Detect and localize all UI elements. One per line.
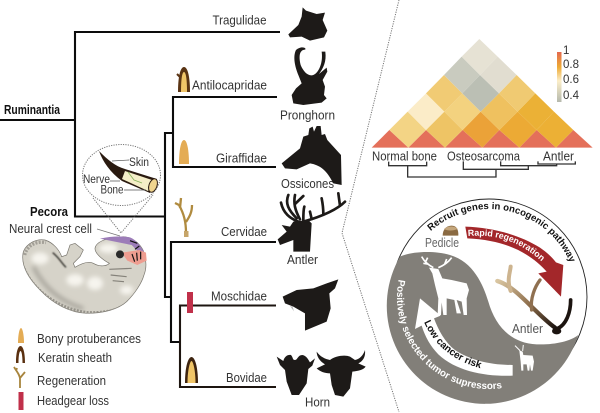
label: pedicle: Pedicle: [425, 236, 459, 250]
white arrow: low cancer risk: [415, 298, 513, 376]
legend: regeneration: Regeneration: [37, 374, 106, 388]
heatmap sample labels: Antler: [543, 148, 575, 164]
heatmap colour legend: 0.6: [563, 74, 579, 86]
headgear labels: [280, 108, 335, 410]
legend: [14, 328, 141, 410]
dendrogram: [389, 161, 575, 177]
heatmap sample labels: [372, 148, 575, 164]
headgear labels: Horn: [305, 394, 330, 410]
icon: small white deer: [515, 345, 534, 371]
embryo illustration: [23, 236, 147, 313]
heatmap colour legend: [557, 45, 580, 102]
heatmap colour legend: 0.4: [563, 90, 580, 102]
icon: giraffid bony protuberance: [179, 140, 189, 164]
headgear labels: Ossicones: [281, 176, 334, 191]
taxon labels: Bovidae: [226, 370, 267, 385]
cross section labels: Bone: [100, 184, 124, 196]
legend: keratin sheath: Keratin sheath: [38, 351, 112, 365]
silhouette: pronghorn head: [292, 47, 327, 105]
curved text: recruit genes: Recruit genes in oncogenic pathway: [427, 202, 575, 261]
heatmap triangle: [372, 39, 593, 148]
icon: headgear loss bar: [187, 292, 193, 313]
label: Neural crest cell: Neural crest cell: [9, 222, 92, 236]
headgear labels: Antler: [287, 252, 319, 267]
icon: cervid antler regeneration: [175, 198, 192, 237]
grey swoosh: [387, 252, 578, 404]
taxon labels: Antilocapridae: [192, 78, 267, 92]
heatmap sample labels: Osteosarcoma: [447, 148, 521, 164]
silhouette: giraffe head: [282, 126, 342, 185]
antler cross section: [99, 151, 159, 193]
silhouette: musk deer head: [283, 279, 338, 331]
taxon labels: Giraffidae: [216, 150, 267, 166]
pointer: neural crest cell: [97, 229, 120, 236]
cross section labels: Nerve: [83, 174, 110, 186]
curved text: low cancer risk: Low cancer risk: [424, 320, 482, 368]
taxon labels: Moschidae: [211, 288, 267, 304]
icon: bovid keratin sheath: [185, 357, 198, 383]
heatmap sample labels: Normal bone: [372, 148, 437, 164]
taxon labels: [192, 12, 267, 385]
dotted divider: [342, 0, 399, 412]
legend: bony protuberances: Bony protuberances: [37, 332, 141, 346]
legend: headgear loss: Headgear loss: [37, 394, 109, 408]
icon: large white stag: [422, 257, 469, 315]
heatmap colour legend: 0.8: [563, 59, 579, 71]
icon: antilocaprid keratin sheath: [177, 67, 190, 92]
cross section labels: Skin: [129, 157, 149, 169]
cycle circle panel: [387, 199, 587, 404]
cross section labels: [83, 157, 149, 196]
silhouette: cow head: [317, 350, 366, 397]
label: Pecora: Pecora: [30, 205, 69, 219]
antler photo: [497, 267, 571, 334]
icon: pedicle: [443, 226, 458, 236]
label: Ruminantia: Ruminantia: [4, 103, 61, 117]
taxon labels: Tragulidae: [212, 12, 266, 28]
heatmap colour legend: 1: [563, 45, 569, 57]
curved text: rapid regeneration: Rapid regeneration: [468, 230, 544, 262]
dotted lens connector and circle: [82, 144, 160, 233]
silhouette: tragulid head: [288, 7, 327, 41]
label: antler: Antler: [512, 322, 543, 336]
silhouette: goat head: [277, 355, 315, 395]
taxon labels: Cervidae: [221, 224, 267, 239]
red arrow: rapid regeneration: [465, 227, 563, 297]
phylogenetic tree: [0, 32, 280, 387]
curved text: tumor suppressors: Positively selected tumor supressors: [396, 280, 502, 390]
silhouette: deer head with antlers: [278, 193, 345, 252]
headgear labels: Pronghorn: [280, 108, 335, 122]
